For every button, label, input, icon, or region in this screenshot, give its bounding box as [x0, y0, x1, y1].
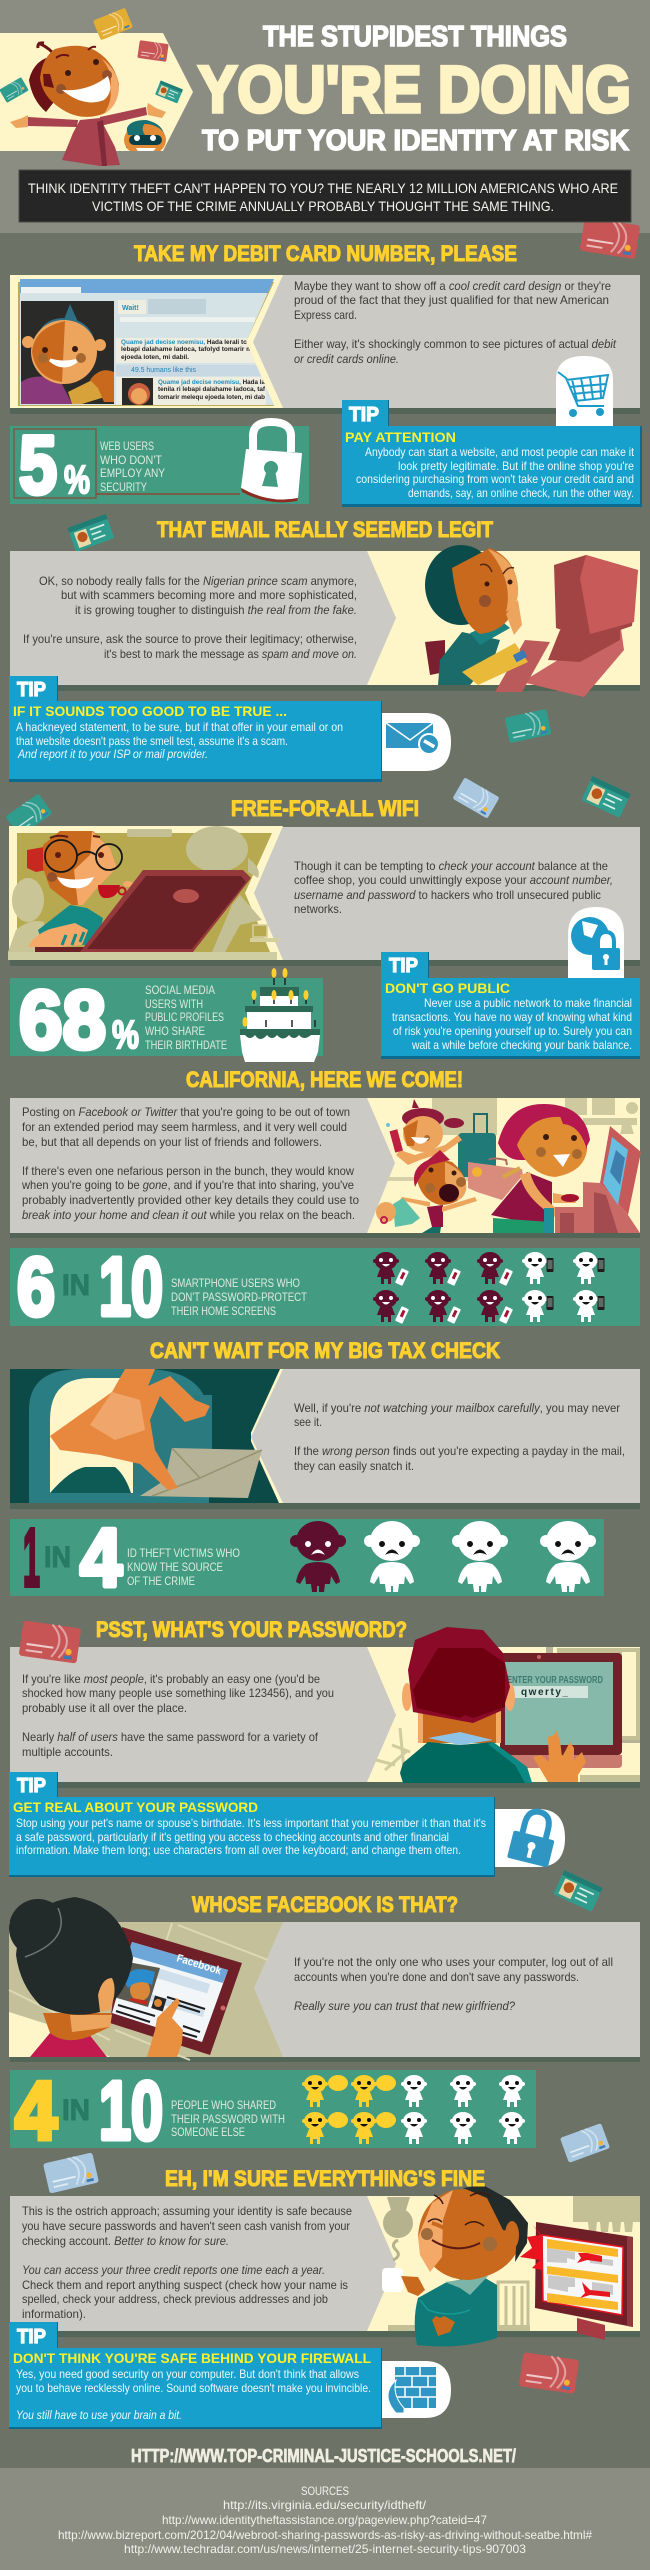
tip: get real about your password: [9, 1772, 565, 1877]
stat: 5 percent: WEB USERS: [100, 439, 154, 453]
illustration: social profile page: tenila ri lebapi dalahame ladoca, taf: [158, 387, 266, 393]
stat: 68 percent: WHO SHARE: [145, 1024, 205, 1038]
text block: [294, 1401, 625, 1473]
text block: Nearly half of users have the same password for a variety of: [22, 1730, 319, 1744]
character: mother: [491, 1104, 590, 1233]
text block: for an extended period may seem harmless, and it very well could: [22, 1120, 347, 1134]
panel: tax check: [10, 1369, 640, 1509]
card: id card: [553, 1870, 603, 1912]
tip: get real about your password: Stop using your pet's name or spouse's birthdate. It's less important that you remember it than that it's: [16, 1816, 486, 1830]
text block: shocked how many people use something like 123456), and you: [22, 1686, 334, 1700]
pictogram: password sharers: [302, 2075, 525, 2144]
stat: 68 percent: [10, 968, 323, 1066]
tip: firewall: TIP: [17, 2326, 46, 2348]
text block: Check them and report anything suspect (check how your name is: [22, 2278, 348, 2292]
stat: 5 percent: 5: [19, 418, 57, 511]
heading: whose facebook: WHOSE FACEBOOK IS THAT?: [192, 1892, 458, 1917]
floating blue cards: [43, 2123, 610, 2194]
illustration: social profile page: ejoeda loten, mi dabil.: [121, 355, 189, 361]
stat: 1 in 4: 4: [80, 1511, 122, 1604]
stat: 6 in 10: THEIR HOME SCREENS: [171, 1304, 276, 1318]
heading: california: CALIFORNIA, HERE WE COME!: [186, 1067, 463, 1092]
tip: get real about your password: information. Make them long; use characters from all over the keyboard; and change them often.: [16, 1843, 461, 1857]
tip: get real about your password: GET REAL ABOUT YOUR PASSWORD: [13, 1799, 258, 1815]
text block: [22, 2204, 352, 2321]
stat: 6 in 10: SMARTPHONE USERS WHO: [171, 1276, 300, 1290]
text block: when you're going to be gone, and if you're that into sharing, you've: [21, 1178, 354, 1192]
tip: if it sounds too good: And report it to your ISP or mail provider.: [17, 747, 208, 761]
illustration: hand stealing envelope: [10, 1369, 280, 1503]
tip: pay attention: TIP: [349, 404, 379, 426]
stat: 6 in 10: DON'T PASSWORD-PROTECT: [171, 1290, 308, 1304]
text block: [21, 1105, 359, 1222]
title: THE STUPIDEST THINGS: [263, 21, 567, 53]
illustration: social profile page: Wait!: [122, 305, 139, 312]
icon: firewall: [381, 2361, 451, 2418]
tip: don't go public: [381, 952, 640, 1059]
stat: 6 in 10: 10: [99, 1240, 163, 1333]
text block: proud of the fact that they just qualified for that new American: [294, 293, 609, 307]
intro box: VICTIMS OF THE CRIME ANNUALLY PROBABLY THOUGHT THE SAME THING.: [92, 198, 554, 214]
intro box: [19, 170, 631, 222]
text block: If you're not the only one who uses your computer, log out of all: [294, 1955, 613, 1969]
tip: get real about your password: TIP: [17, 1775, 46, 1797]
heading: free-for-all wifi: FREE-FOR-ALL WIFI: [231, 796, 419, 821]
tip: get real about your password: a safe password, particularly if it's getting you access to checking accounts and other financial: [16, 1830, 449, 1844]
tip: firewall: Yes, you need good security on your computer. But don't think that allows: [16, 2367, 359, 2381]
tip: pay attention: PAY ATTENTION: [345, 429, 456, 445]
stat: 1 in 4: [10, 1511, 604, 1604]
character: masked thief: [124, 120, 166, 151]
heading: everything's fine: EH, I'M SURE EVERYTHING'S FINE: [165, 2166, 485, 2191]
text block: [294, 1955, 613, 2013]
illustration: man typing password: qwerty_: [521, 1687, 568, 1698]
text block: multiple accounts.: [22, 1745, 113, 1759]
character: man holding card: [21, 304, 114, 404]
text block: [294, 859, 613, 916]
illustration: person with tablet: [9, 1897, 268, 2060]
text block: Well, if you're not watching your mailbox carefully, you may never: [294, 1401, 620, 1415]
icon: blue lock: [494, 1807, 565, 1868]
illustration: man at computer: [425, 545, 638, 697]
pictogram: smartphone users: [373, 1252, 604, 1324]
banner illustration: man juggling cards: [0, 33, 193, 166]
illustration: man with coffee and monitor: [382, 2185, 640, 2346]
stat: 1 in 4: OF THE CRIME: [127, 1574, 195, 1588]
character: smiling man: [10, 43, 166, 166]
text block: information).: [22, 2307, 86, 2321]
text block: OK, so nobody really falls for the Nigerian prince scam anymore,: [39, 574, 357, 588]
floating cards near wifi heading: [5, 709, 631, 837]
text block: If the wrong person finds out you're expecting a payday in the mail,: [294, 1444, 625, 1458]
floating credit cards around banner: [0, 8, 640, 259]
stat: 4 in 10: PEOPLE WHO SHARED: [171, 2098, 276, 2112]
text block: checking account. Better to know for sure.: [22, 2234, 229, 2248]
pictogram: victims: [290, 1521, 596, 1592]
character: baby: [376, 1198, 420, 1227]
text block: [23, 574, 357, 661]
stat: 68 percent: USERS WITH: [145, 997, 203, 1011]
sources: http://its.virginia.edu/security/idtheft/: [223, 2498, 427, 2512]
text block: If there's even one nefarious person in the bunch, they would know: [22, 1164, 354, 1178]
panel: everything's fine: [10, 2185, 640, 2346]
stat: 5 percent: WHO DON'T: [100, 453, 163, 467]
stat: 5 percent: EMPLOY ANY: [100, 466, 165, 480]
character: shouting boy: [400, 1150, 477, 1233]
tip: if it sounds too good: [9, 676, 451, 782]
title: [198, 21, 631, 157]
card: id card: [67, 514, 115, 552]
illustration: social profile page: [18, 279, 280, 406]
text block: see it.: [294, 1415, 322, 1429]
illustration: person with tablet: Facebook: [175, 1952, 223, 1978]
text block: it is growing tougher to distinguish the real from the fake.: [75, 603, 357, 617]
text block: Posting on Facebook or Twitter that you're going to be out of town: [22, 1105, 350, 1119]
text block: [294, 279, 617, 366]
text block: Though it can be tempting to check your account balance at the: [294, 859, 608, 873]
panel: email: [10, 545, 640, 697]
stat: 4 in 10: 4: [15, 2064, 57, 2157]
stat: 5 percent: %: [64, 458, 90, 502]
footer url: HTTP://WWW.TOP-CRIMINAL-JUSTICE-SCHOOLS.NET/: [131, 2446, 516, 2466]
sources: SOURCES: [301, 2484, 349, 2498]
illustration: social profile page: 49.5 humans like this: [131, 367, 196, 374]
illustration: man typing password: ENTER YOUR PASSWORD: [507, 1675, 603, 1686]
stat: 6 in 10: [10, 1240, 640, 1333]
stat: 4 in 10: THEIR PASSWORD WITH: [171, 2112, 285, 2126]
text block: break into your home and clean it out while you relax on the beach.: [22, 1208, 355, 1222]
stat: 4 in 10: IN: [62, 2094, 90, 2127]
card: red credit card: [19, 1620, 81, 1664]
stat: 1 in 4: 1: [23, 1511, 40, 1604]
text block: Either way, it's shockingly common to see pictures of actual debit: [294, 337, 617, 351]
heading: that email: THAT EMAIL REALLY SEEMED LEGIT: [157, 517, 493, 542]
text block: or credit cards online.: [294, 352, 399, 366]
panel: facebook: [9, 1897, 640, 2062]
tip: firewall: DON'T THINK YOU'RE SAFE BEHIND YOUR FIREWALL: [13, 2350, 371, 2366]
heading: tax check: CAN'T WAIT FOR MY BIG TAX CHECK: [150, 1338, 500, 1363]
text block: spelled, check your address, check previous addresses and job: [22, 2292, 328, 2306]
tip: if it sounds too good: that website doesn't pass the smell test, assume it's a scam.: [16, 734, 288, 748]
sources: http://www.bizreport.com/2012/04/webroot-sharing-passwords-as-risky-as-driving-without-seatbe.html#: [58, 2528, 592, 2542]
tip: pay attention: [342, 400, 642, 507]
stat: 4 in 10: 10: [99, 2064, 163, 2157]
illustration: man typing password: [376, 1627, 640, 1783]
card: red credit card: [519, 2352, 579, 2394]
text block: they can easily snatch it.: [294, 1459, 414, 1473]
panel: wifi: [8, 826, 640, 966]
icon: birthday cake: [240, 968, 320, 1062]
tip: firewall: [9, 2322, 451, 2429]
text block: but with scammers becoming more and more sophisticated,: [61, 588, 357, 602]
panel: debit card: [10, 275, 640, 414]
illustration: social profile page: lebapi dalahame ladoca, tafolyd tomarir m: [121, 347, 252, 353]
illustration: social profile page: Quame jad decise noemisu, Hada la: [158, 380, 266, 386]
text block: probably inadvertently provided other key details they could use to: [22, 1193, 359, 1207]
stat: 5 percent: SECURITY: [100, 480, 147, 494]
text block: Really sure you can trust that new girlfriend?: [294, 1999, 515, 2013]
text block: probably use it all over the place.: [22, 1701, 187, 1715]
stat: 4 in 10: SOMEONE ELSE: [171, 2125, 245, 2139]
stat: 68 percent: 68: [19, 973, 106, 1066]
character: girl with water gun: [386, 1099, 464, 1165]
text block: be, but that all depends on your list of friends and followers.: [22, 1135, 322, 1149]
sources: http://www.identitytheftassistance.org/pageview.php?cateid=47: [162, 2513, 487, 2527]
text block: Maybe they want to show off a cool credit card design or they're: [294, 279, 611, 293]
tip: if it sounds too good: A hackneyed statement, to be sure, but if that offer in your email or on: [16, 720, 343, 734]
illustration: social profile page: Quame jad decise noemisu, Hada lerali to: [121, 340, 247, 346]
stat: 6 in 10: 6: [17, 1240, 55, 1333]
stat: 68 percent: SOCIAL MEDIA: [145, 983, 215, 997]
sources: http://www.techradar.com/us/news/internet/25-internet-security-tips-907003: [124, 2542, 526, 2556]
stat: 1 in 4: ID THEFT VICTIMS WHO: [127, 1546, 240, 1560]
text block: coffee shop, you could unwittingly expose your account number,: [294, 873, 613, 887]
icon: globe and lock: [568, 907, 624, 978]
stat: 68 percent: PUBLIC PROFILES: [145, 1010, 224, 1024]
stat: 68 percent: THEIR BIRTHDATE: [145, 1038, 227, 1052]
tip: don't go public: TIP: [389, 955, 418, 977]
icon: shopping cart: [556, 356, 613, 426]
text block: Express card.: [294, 308, 357, 322]
tip: don't go public: DON'T GO PUBLIC: [385, 980, 510, 996]
stat: 1 in 4: KNOW THE SOURCE: [127, 1560, 223, 1574]
icon: padlock: [241, 422, 302, 502]
text block: accounts when you're done and don't save any passwords.: [294, 1970, 579, 1984]
text block: [22, 1672, 334, 1759]
panel: password: [10, 1627, 640, 1788]
stat: 5 percent: [10, 418, 309, 511]
text block: You can access your three credit reports one time each a year.: [22, 2263, 325, 2277]
tip: if it sounds too good: TIP: [17, 679, 46, 701]
sources: [58, 2484, 592, 2556]
tip: firewall: you to behave recklessly online. Sound software doesn't make you invincible.: [16, 2381, 371, 2395]
heading: take my debit card number: TAKE MY DEBIT CARD NUMBER, PLEASE: [134, 241, 517, 266]
stat: 4 in 10: [10, 2064, 536, 2157]
text block: username and password to hackers who troll unsecured public: [294, 888, 601, 902]
illustration: person with laptop at cafe: [8, 826, 280, 960]
text block: If you're like most people, it's probably an easy one (you'd be: [22, 1672, 320, 1686]
text block: you have secure passwords and haven't seen cash vanish from your: [22, 2219, 350, 2233]
heading: psst: PSST, WHAT'S YOUR PASSWORD?: [96, 1617, 407, 1642]
panel: california: [10, 1098, 641, 1238]
tip: firewall: You still have to use your brain a bit.: [16, 2408, 182, 2422]
stat: 1 in 4: IN: [44, 1541, 71, 1574]
icon: blocked email: [381, 713, 451, 771]
title: TO PUT YOUR IDENTITY AT RISK: [202, 125, 629, 157]
text block: This is the ostrich approach; assuming your identity is safe because: [22, 2204, 352, 2218]
text block: it's best to mark the message as spam and move on.: [104, 647, 357, 661]
tip: if it sounds too good: IF IT SOUNDS TOO GOOD TO BE TRUE ...: [13, 703, 287, 719]
text block: If you're unsure, ask the source to prove their legitimacy; otherwise,: [23, 632, 357, 646]
register and monitor: [544, 1126, 641, 1233]
illustration: family leaving on vacation: [376, 1098, 641, 1233]
stat: 68 percent: %: [112, 1013, 139, 1057]
stat: 6 in 10: IN: [62, 1269, 90, 1302]
illustration: social profile page: tomarir melequ ejoeda loten, mi dab: [158, 395, 265, 401]
text block: networks.: [294, 902, 342, 916]
